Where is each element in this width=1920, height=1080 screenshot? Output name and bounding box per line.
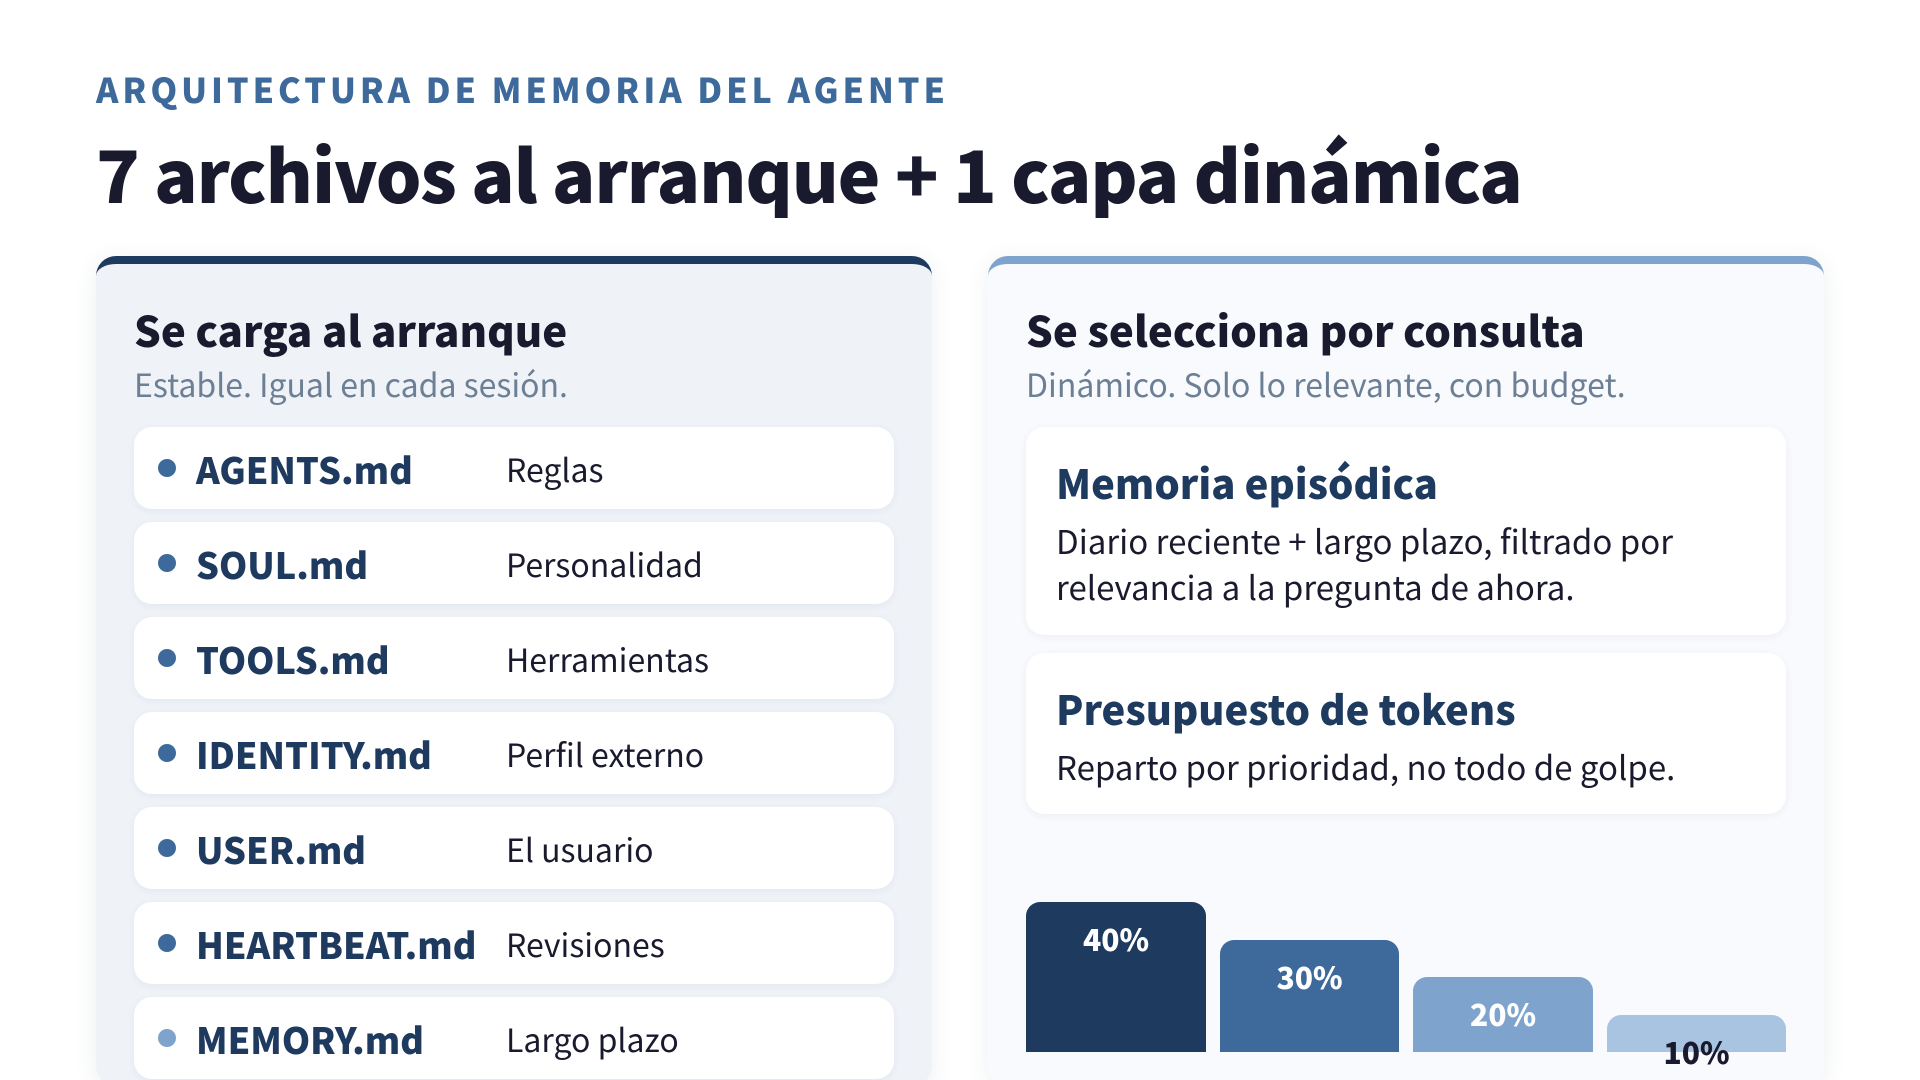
bar: 40% (1026, 902, 1206, 1052)
bar: 30%: 30% (1276, 954, 1343, 998)
row: AGENTS.md: Reglas (506, 446, 603, 492)
panel: boot-loaded background (96, 256, 932, 1080)
row: SOUL.md: Personalidad (506, 541, 703, 587)
card: episodic memory (1026, 427, 1786, 635)
row: TOOLS.md (134, 617, 894, 699)
row: MEMORY.md: MEMORY.md (196, 1013, 424, 1065)
row: AGENTS.md: AGENTS.md (196, 443, 413, 495)
row: MEMORY.md (134, 997, 894, 1079)
bar: 20% (1413, 977, 1593, 1052)
title: 7 archivos al arranque + 1 capa dinámica (96, 119, 1522, 224)
row: HEARTBEAT.md: HEARTBEAT.md (196, 918, 476, 970)
card: episodic memory: relevancia a la pregunta de ahora. (1056, 562, 1575, 610)
subheading: boot panel: Estable. Igual en cada sesión. (134, 361, 568, 407)
row: TOOLS.md: TOOLS.md (196, 633, 390, 685)
row: IDENTITY.md (134, 712, 894, 794)
bar: 10% (1607, 1015, 1786, 1052)
row: AGENTS.md (134, 427, 894, 509)
card: episodic memory: Diario reciente + largo plazo, filtrado por (1056, 516, 1673, 564)
panel: per-query background (988, 256, 1824, 1080)
row: HEARTBEAT.md (134, 902, 894, 984)
bar: 10%: 10% (1663, 1029, 1730, 1073)
row: MEMORY.md: Largo plazo (506, 1016, 679, 1062)
heading: query panel: Se selecciona por consulta (1026, 299, 1585, 360)
bar: 30% (1220, 940, 1399, 1052)
row: IDENTITY.md: Perfil externo (506, 731, 704, 777)
eyebrow heading: ARQUITECTURA DE MEMORIA DEL AGENTE (96, 64, 949, 113)
card: token budget: Reparto por prioridad, no todo de golpe. (1056, 742, 1675, 790)
row: TOOLS.md: Herramientas (506, 636, 709, 682)
row: IDENTITY.md: IDENTITY.md (196, 728, 432, 780)
bar: 40%: 40% (1083, 916, 1149, 960)
bar chart: token budget shares (1026, 902, 1786, 1073)
card: token budget: Presupuesto de tokens (1056, 679, 1516, 737)
row: SOUL.md: SOUL.md (196, 538, 368, 590)
bar: 20%: 20% (1470, 991, 1536, 1035)
card: token budget (1026, 653, 1786, 814)
card: episodic memory: Memoria episódica (1056, 453, 1438, 511)
heading: boot panel: Se carga al arranque (134, 299, 567, 360)
row: USER.md (134, 807, 894, 889)
subheading: query panel: Dinámico. Solo lo relevante, con budget. (1026, 361, 1626, 407)
row: USER.md: El usuario (506, 826, 654, 872)
row: HEARTBEAT.md: Revisiones (506, 921, 665, 967)
row: SOUL.md (134, 522, 894, 604)
row: USER.md: USER.md (196, 823, 366, 875)
